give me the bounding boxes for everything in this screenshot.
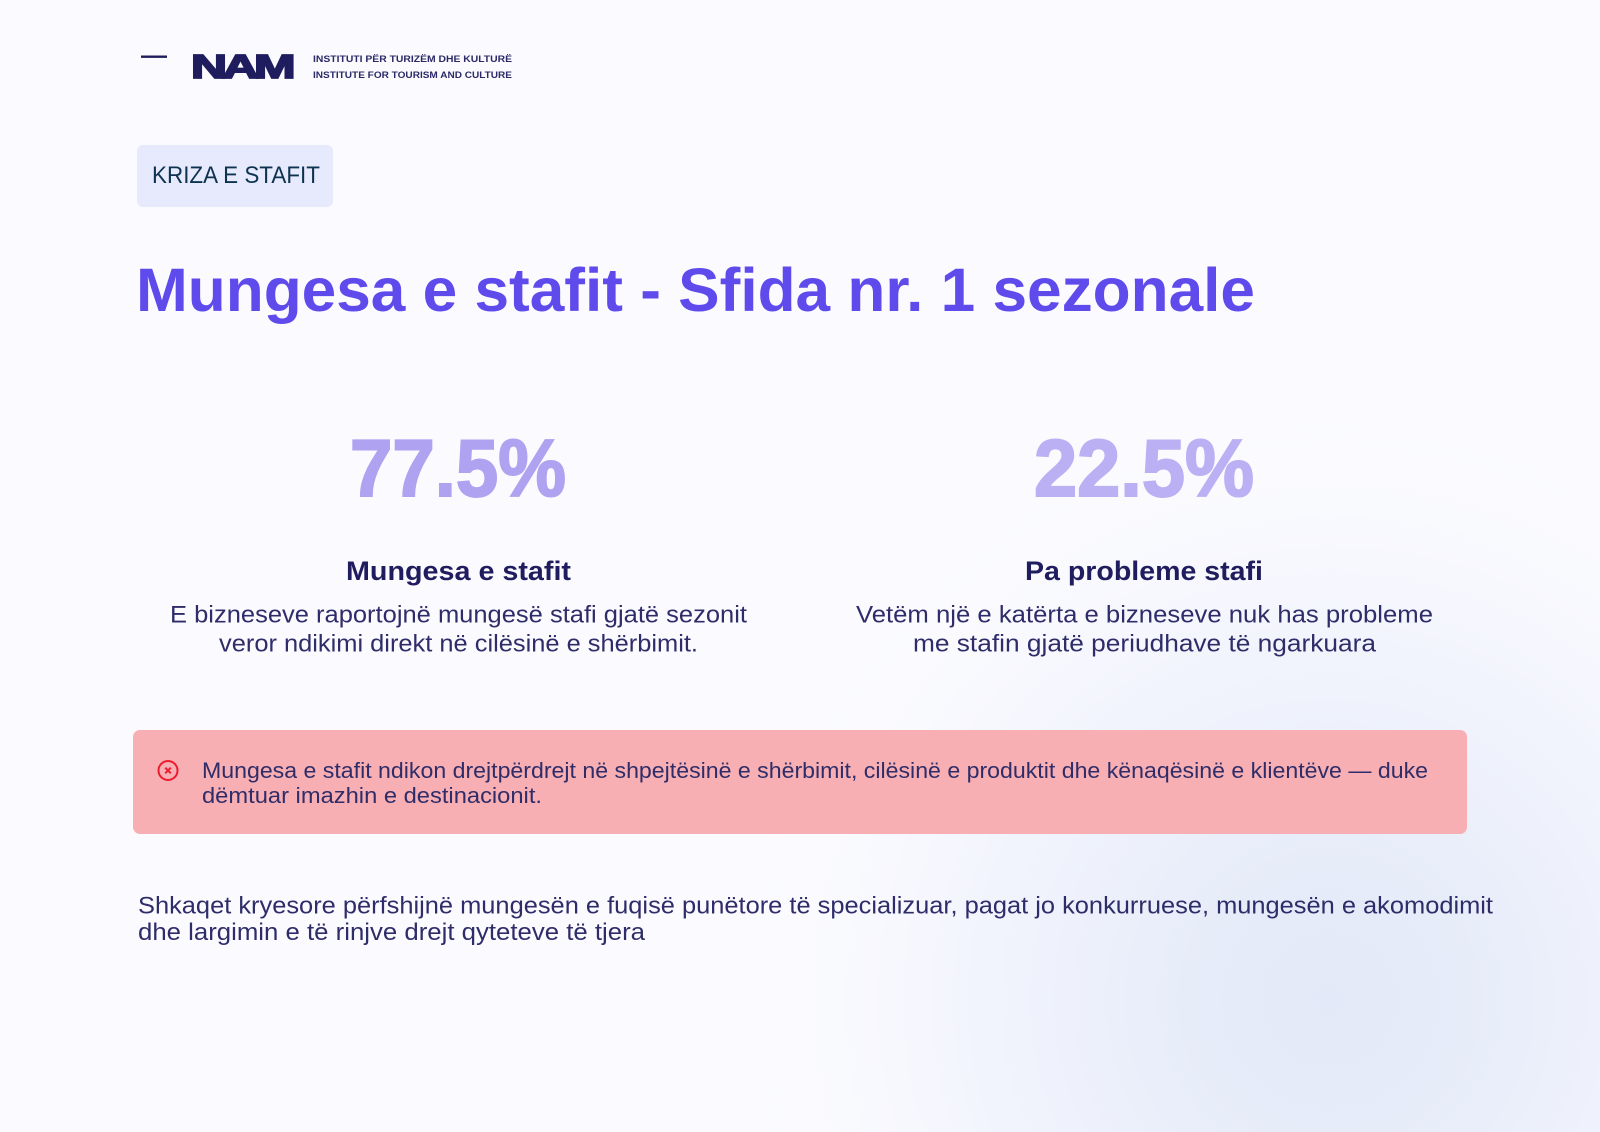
stat description: E bizneseve raportojnë mungesë stafi gjatë sezonit bbox=[170, 602, 747, 628]
stat description bbox=[856, 602, 1433, 658]
stat value 22.5%: 22.5% bbox=[1034, 424, 1254, 514]
logo tagline: INSTITUTI PËR TURIZËM DHE KULTURË bbox=[313, 54, 512, 65]
stat description: veror ndikimi direkt në cilësinë e shërbimit. bbox=[219, 630, 698, 658]
category badge: KRIZA E STAFIT bbox=[152, 162, 320, 189]
alert text: dëmtuar imazhin e destinacionit. bbox=[202, 783, 542, 808]
logo wordmark: NAM bbox=[191, 48, 293, 85]
icon: error cross in circle bbox=[158, 761, 178, 780]
stat description bbox=[170, 602, 747, 658]
logo tagline bbox=[313, 54, 512, 81]
logo tagline: INSTITUTE FOR TOURISM AND CULTURE bbox=[313, 70, 512, 81]
stat column: no staff problems bbox=[856, 424, 1433, 658]
alert text bbox=[202, 758, 1428, 808]
causes paragraph: Shkaqet kryesore përfshijnë mungesën e fuqisë punëtore të specializuar, pagat jo konkurruese, mungesën e akomodimit bbox=[138, 892, 1493, 920]
stat description: Vetëm një e katërta e bizneseve nuk has probleme bbox=[856, 602, 1433, 628]
alert text: Mungesa e stafit ndikon drejtpërdrejt në shpejtësinë e shërbimit, cilësinë e produktit dhe kënaqësinë e klientëve — duke bbox=[202, 758, 1428, 783]
stat heading: Mungesa e stafit bbox=[346, 556, 571, 586]
stat description: me stafin gjatë periudhave të ngarkuara bbox=[913, 630, 1377, 658]
causes paragraph bbox=[138, 892, 1493, 946]
category badge bbox=[137, 145, 333, 207]
stat column: staff shortage bbox=[170, 424, 747, 658]
causes paragraph: dhe largimin e të rinjve drejt qyteteve të tjera bbox=[138, 919, 646, 946]
stat heading: Pa probleme stafi bbox=[1025, 556, 1263, 586]
stat value 77.5%: 77.5% bbox=[350, 424, 566, 514]
alert panel bbox=[133, 730, 1467, 834]
title: Mungesa e stafit - Sfida nr. 1 sezonale bbox=[136, 256, 1255, 324]
logo header bbox=[141, 48, 512, 85]
